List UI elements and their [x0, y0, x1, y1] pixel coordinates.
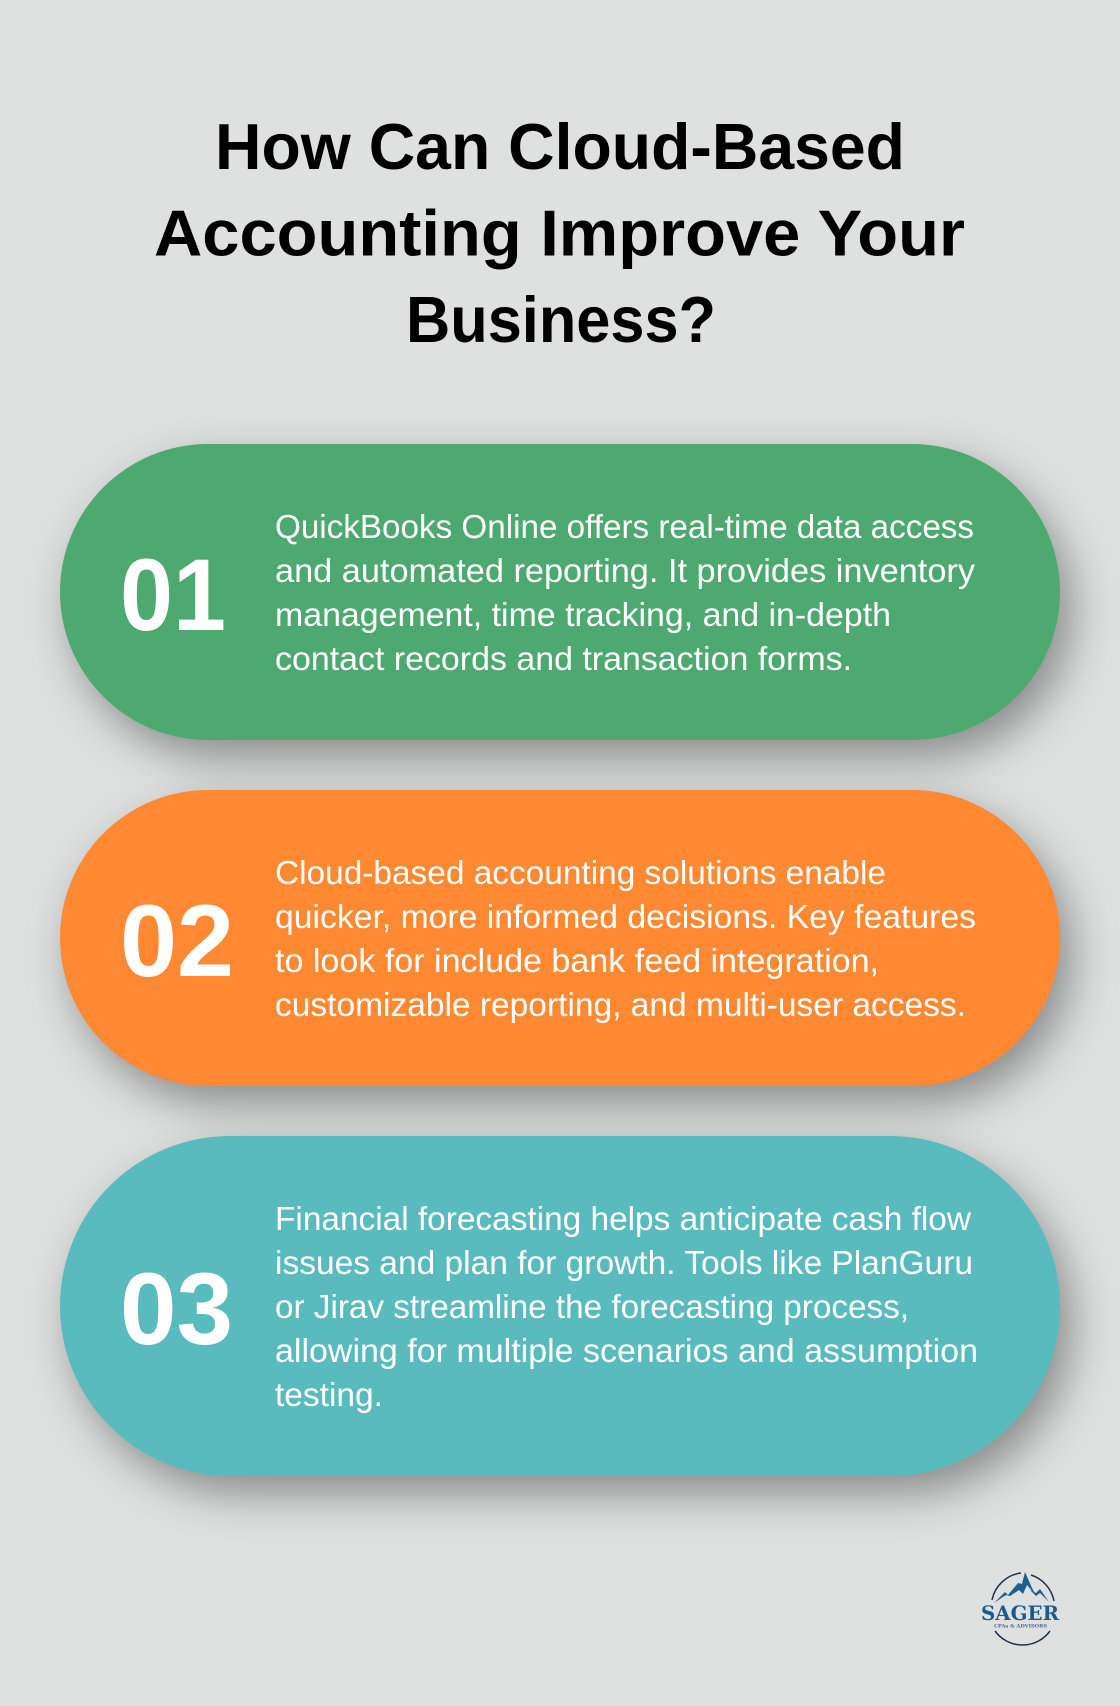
title: How Can Cloud-Based — [215, 110, 905, 183]
icon: mountain — [994, 1572, 1049, 1603]
text block: step 01 description: QuickBooks Online offers real-time data access — [275, 508, 974, 545]
text block: step 02 description — [275, 854, 976, 1023]
text block: step 03 description: allowing for multiple scenarios and assumption — [275, 1332, 978, 1369]
text block: step 02 description: quicker, more informed decisions. Key features — [275, 898, 976, 935]
text block: step 03 description: issues and plan for growth. Tools like PlanGuru — [275, 1244, 973, 1281]
step number 02: 02 — [120, 884, 234, 998]
text block: step 03 description — [275, 1200, 978, 1413]
tagline: CPAs & ADVISORS — [994, 1624, 1048, 1630]
logo: Sager CPAs & Advisors — [981, 1572, 1060, 1646]
panel: step 02 — [60, 790, 1060, 1086]
text block: step 03 description: testing. — [275, 1376, 383, 1413]
text block: step 01 description: contact records and transaction forms. — [275, 640, 852, 677]
title — [154, 110, 965, 356]
panel: step 01 — [60, 444, 1060, 740]
title: Accounting Improve Your — [154, 196, 965, 270]
text block: step 01 description: management, time tracking, and in-depth — [275, 596, 891, 633]
title: Business? — [406, 283, 716, 356]
text block: step 02 description: to look for include bank feed integration, — [275, 942, 879, 979]
text block: step 01 description: and automated reporting. It provides inventory — [275, 552, 976, 589]
text block: step 02 description: customizable reporting, and multi-user access. — [275, 986, 966, 1023]
text block: step 03 description: or Jirav streamline the forecasting process, — [275, 1288, 909, 1325]
logo ring arcs — [992, 1573, 1054, 1645]
step number 01: 01 — [120, 538, 226, 652]
panel: step 03 — [60, 1136, 1060, 1476]
text block: step 01 description — [275, 508, 976, 677]
step number 03: 03 — [120, 1252, 233, 1366]
wordmark: SAGER — [981, 1602, 1060, 1625]
text block: step 03 description: Financial forecasting helps anticipate cash flow — [275, 1200, 971, 1237]
text block: step 02 description: Cloud-based accounting solutions enable — [275, 854, 886, 891]
